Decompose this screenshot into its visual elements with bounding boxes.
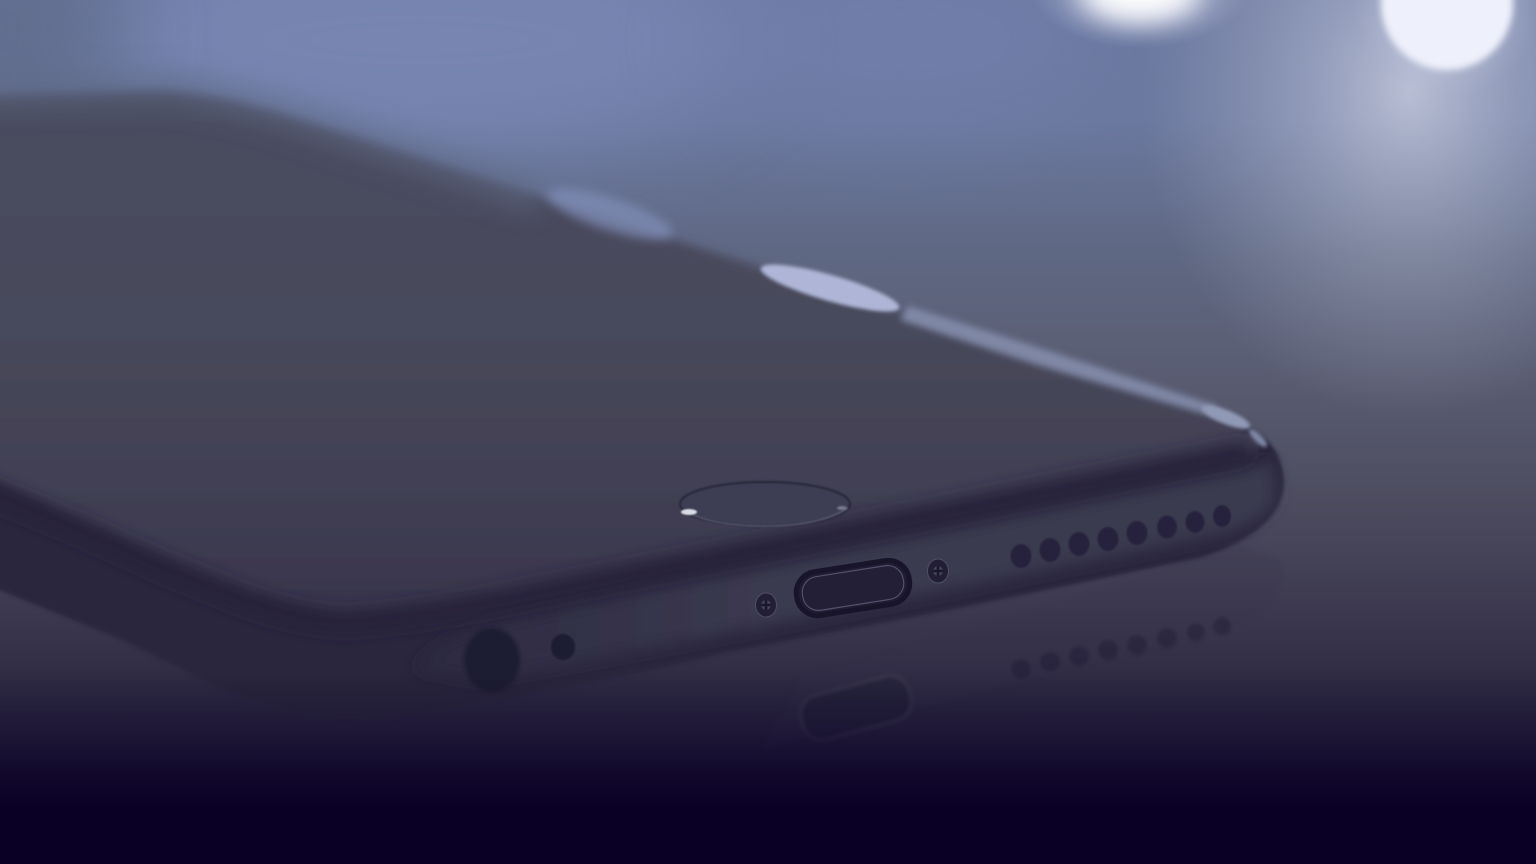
microphone hole (551, 634, 575, 660)
left screw (756, 593, 776, 617)
reflection of phone on table (760, 545, 1282, 750)
bokeh lights: top right (1030, 0, 1536, 101)
speaker grille (1010, 505, 1231, 568)
home button (680, 482, 850, 526)
soft blurred upper edge of the screen (0, 88, 540, 198)
dark bottom fade (0, 670, 1536, 864)
phone screen glass (0, 90, 1259, 616)
dark edge line below screen (0, 450, 1250, 622)
phone body: edge band (0, 300, 1284, 720)
charging port (793, 557, 913, 619)
light beam: right side glow (1140, 0, 1536, 420)
headphone jack (464, 628, 520, 692)
glass edge highlights (542, 178, 1269, 449)
right screw (928, 559, 948, 583)
